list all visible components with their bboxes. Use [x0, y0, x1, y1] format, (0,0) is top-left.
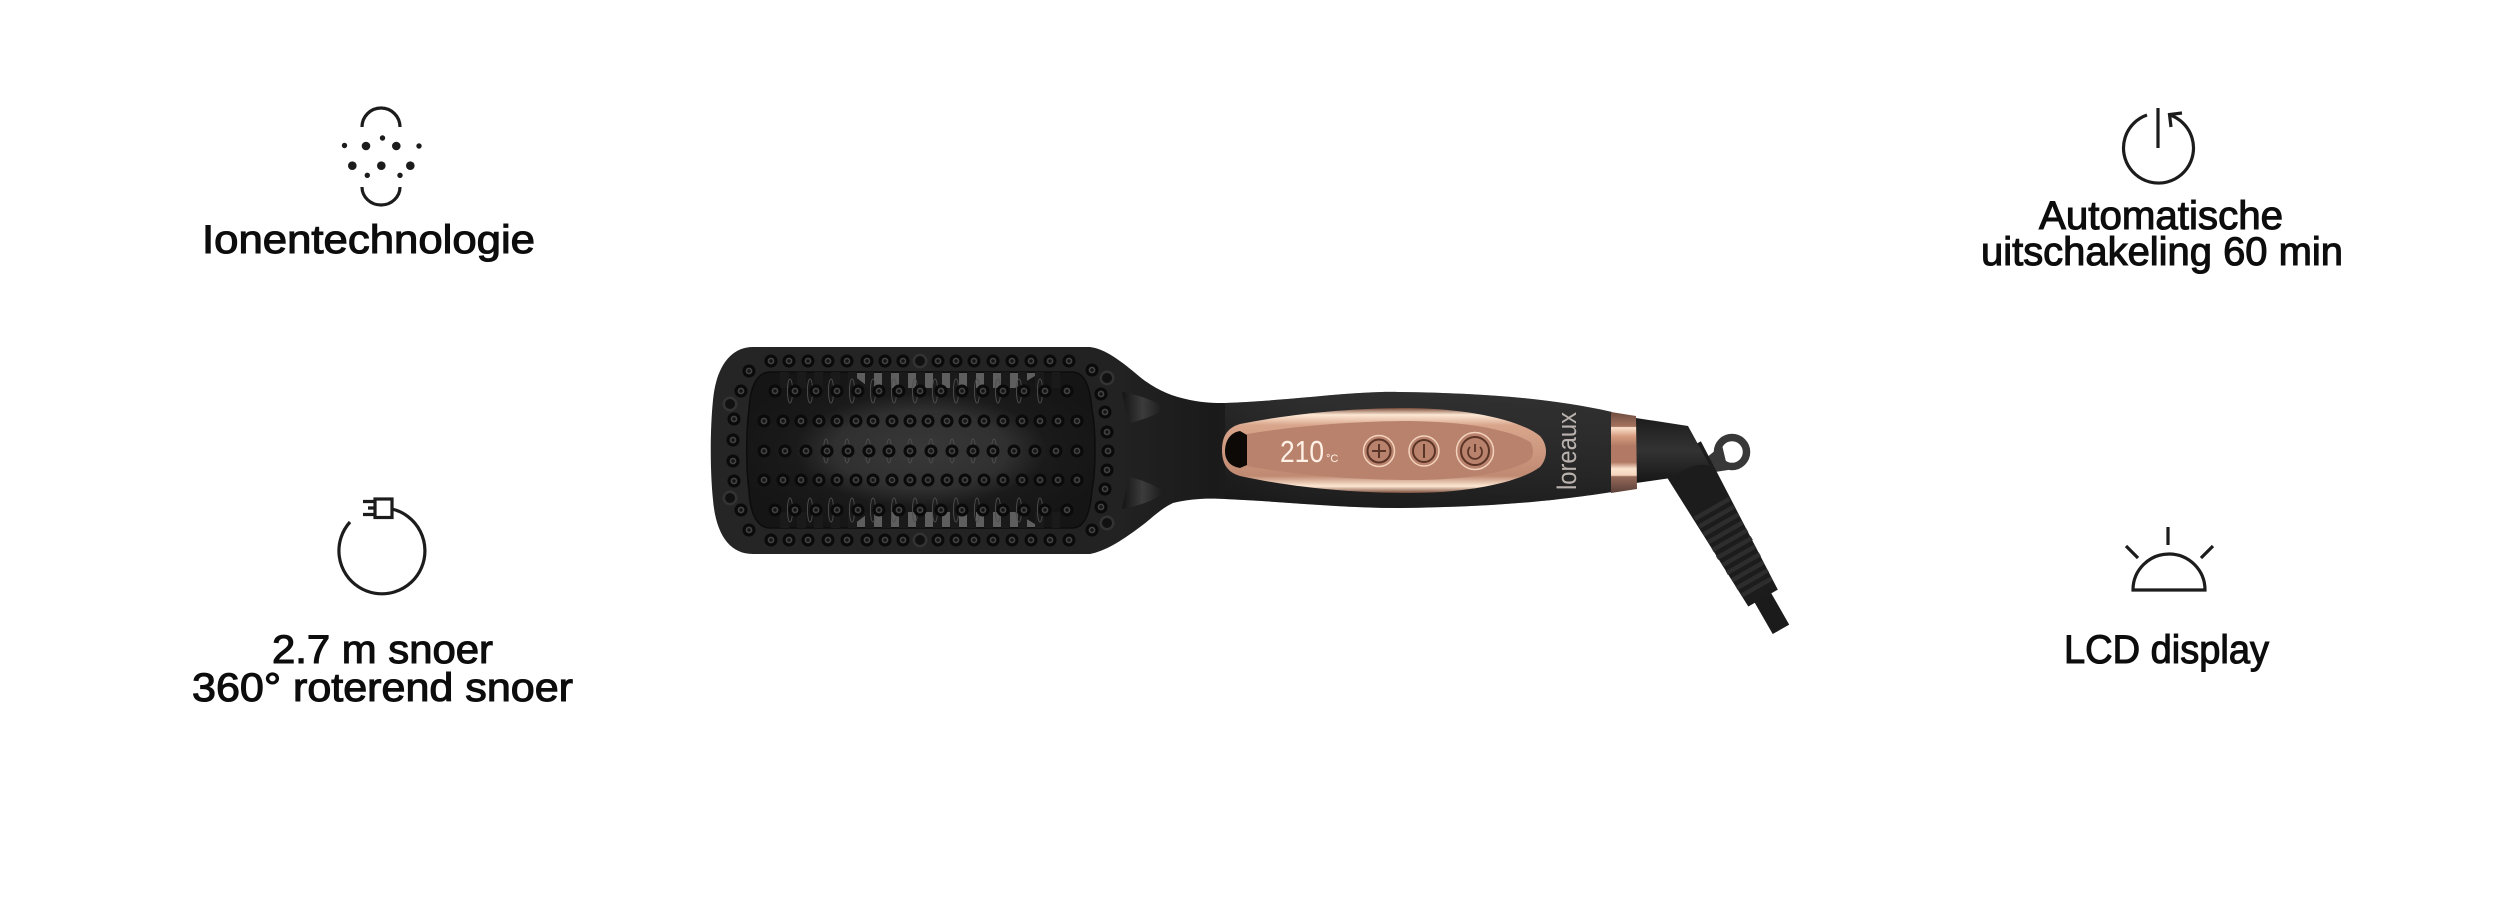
copper collar: [1611, 412, 1637, 493]
label: LCD display: LCD display: [2064, 628, 2269, 672]
bristle pins: [722, 354, 1114, 548]
label: cord length and rotation: 2.7 m snoer: [272, 628, 493, 672]
product: hair straightening brush: [711, 347, 1789, 634]
label: automatic shut-off: uitschakeling 60 min: [1981, 230, 2343, 274]
label: automatic shut-off: Automatische: [2039, 194, 2283, 238]
label: cord length and rotation: 360° roterend snoer: [192, 666, 573, 710]
brand: loreaux: loreaux: [1552, 412, 1582, 490]
icon: LCD display lamp: [2126, 527, 2213, 590]
strain relief with ribs: [1659, 441, 1784, 610]
hanging ring: [1706, 438, 1746, 472]
button: plus: [1364, 436, 1394, 466]
label: Ionentechnologie: Ionentechnologie: [202, 218, 535, 262]
label: cord length and rotation: [192, 628, 573, 710]
icon: auto shut-off power: [2124, 108, 2194, 183]
button: minus: [1409, 436, 1439, 466]
icon: cord with plug: [339, 499, 425, 594]
icon: ion technology: [342, 108, 422, 205]
label: automatic shut-off: [1981, 194, 2343, 274]
brush body and handle: [711, 347, 1612, 554]
temperature display 210 °C: 210: [1280, 434, 1324, 469]
button: power: [1456, 432, 1494, 470]
cable: [1753, 591, 1789, 634]
side grips: [1122, 392, 1163, 509]
bristle mat: [747, 372, 1095, 528]
temperature display 210 °C: °C: [1326, 453, 1338, 465]
control panel rose gold: [1222, 408, 1546, 493]
swivel neck: [1636, 418, 1710, 483]
